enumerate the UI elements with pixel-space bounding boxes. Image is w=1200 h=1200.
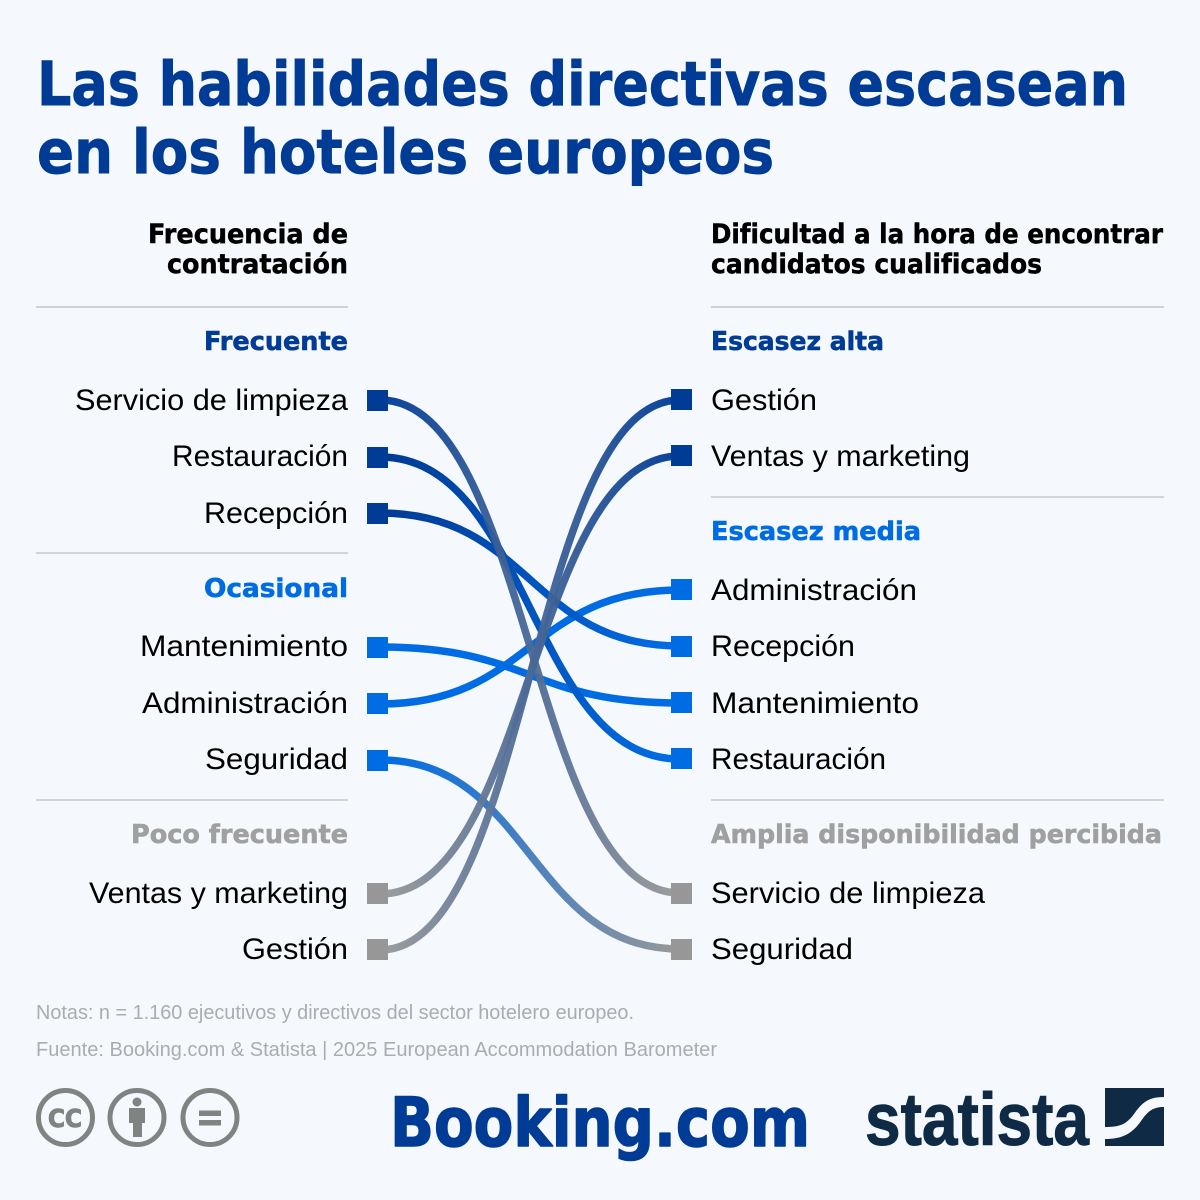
labels: medium scarcity: Administración [711,574,917,607]
labels: high scarcity: Ventas y marketing [711,440,970,473]
labels: medium scarcity [711,574,919,776]
labels: infrequent roles: Gestión [242,933,348,966]
labels: high scarcity [711,384,970,473]
labels: wide availability: Servicio de limpieza [711,877,985,910]
labels: wide availability [711,877,985,966]
labels: infrequent roles: Ventas y marketing [89,877,348,910]
labels: frequent roles: Restauración [172,440,348,473]
title: en los hoteles europeos [37,117,774,188]
icon: no derivatives equals [183,1090,237,1144]
labels: wide availability: Seguridad [711,933,853,966]
icon: attribution person [110,1090,164,1144]
labels: frequent roles: Recepción [204,497,348,530]
icon: creative commons [38,1090,92,1144]
labels: occasional roles [140,630,348,776]
logo: Statista wordmark: statista [865,1078,1090,1161]
heading: hiring frequency: Frecuencia de [148,219,348,250]
labels: medium scarcity: Mantenimiento [711,687,919,720]
labels: medium scarcity: Restauración [711,743,886,776]
group heading: Poco frecuente: Poco frecuente [131,820,348,850]
labels: occasional roles: Mantenimiento [140,630,348,663]
labels: frequent roles [75,384,348,530]
markers: right column squares [671,389,692,960]
labels: occasional roles: Administración [142,687,348,720]
heading: hiring frequency [148,219,348,280]
group heading: Escasez alta: Escasez alta [711,327,884,357]
notes and source: Notas: n = 1.160 ejecutivos y directivos del sector hotelero europeo. [36,1002,634,1024]
icon: creative commons: CC [48,1104,82,1133]
logo: Statista mark [1105,1088,1164,1146]
notes and source [36,1002,717,1061]
heading: difficulty finding candidates: candidatos cualificados [711,249,1042,280]
panel: right column, difficulty finding candidates [711,219,1164,966]
group heading: Amplia disponibilidad percibida: Amplia disponibilidad percibida [711,820,1162,850]
chart: slope connectors between columns [380,400,680,950]
heading: difficulty finding candidates [711,219,1164,280]
labels: frequent roles: Servicio de limpieza [75,384,348,417]
panel: left column, hiring frequency [36,219,348,966]
labels: medium scarcity: Recepción [711,630,855,663]
markers: left column squares [367,390,388,960]
heading: difficulty finding candidates: Dificultad a la hora de encontrar [711,219,1164,250]
labels: occasional roles: Seguridad [205,743,348,776]
heading: hiring frequency: contratación [167,249,348,280]
logo: Booking.com: Booking.com [390,1084,810,1163]
labels: infrequent roles [89,877,348,966]
group heading: Frecuente: Frecuente [204,327,348,357]
labels: high scarcity: Gestión [711,384,817,417]
notes and source: Fuente: Booking.com & Statista | 2025 European Accommodation Barometer [36,1039,717,1061]
group heading: Ocasional: Ocasional [204,574,348,604]
title [37,49,1128,188]
group heading: Escasez media: Escasez media [711,517,921,547]
